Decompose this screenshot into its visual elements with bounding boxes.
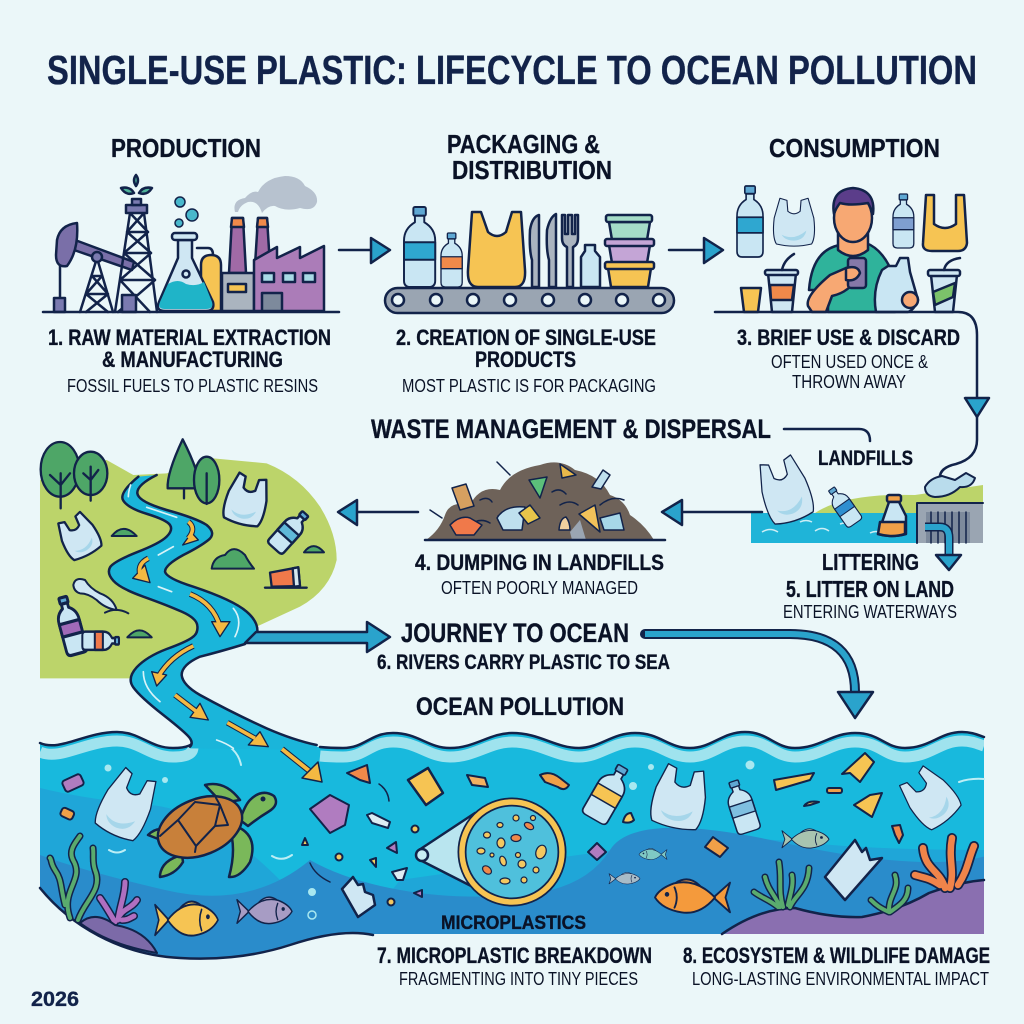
icon: trees (41, 439, 219, 508)
icon: large bottle (404, 207, 435, 287)
illustration: litter scene (751, 453, 983, 570)
heading: waste management: WASTE MANAGEMENT & DISPERSAL (371, 414, 771, 444)
text: step 3: OFTEN USED ONCE & (771, 352, 928, 372)
heading: ocean pollution: OCEAN POLLUTION (416, 693, 624, 721)
text: step 4: OFTEN POORLY MANAGED (441, 578, 638, 598)
icon: seaweed small (871, 875, 908, 912)
debris right (540, 753, 903, 860)
illustration: land and river (40, 439, 337, 750)
icon: ocean bag left (91, 764, 163, 845)
icon: orange bottle (878, 495, 906, 536)
text: step 1: 1. RAW MATERIAL EXTRACTION (48, 325, 331, 350)
ocean outline (40, 732, 984, 959)
arrow head (965, 398, 989, 417)
yellow flow arrows (133, 522, 268, 747)
text: step 3: 3. BRIEF USE & DISCARD (737, 325, 960, 350)
icon: small teal fish (639, 848, 667, 860)
icon: ocean bottle right (722, 778, 761, 835)
sea floor right (722, 880, 986, 936)
icon: purple fish (237, 897, 292, 924)
icon: yellow bag right (923, 195, 967, 251)
cone (419, 813, 475, 888)
illustration: landfill pile (425, 462, 665, 540)
illustration: consumption (737, 186, 967, 312)
icon: person (808, 188, 895, 312)
icon: land bottles (53, 595, 119, 656)
icon: factory (222, 218, 324, 311)
icon: bottle right (893, 194, 914, 248)
heading: packaging and distribution: DISTRIBUTION (452, 155, 612, 185)
icon: purple coral (100, 882, 137, 922)
text: step 5: ENTERING WATERWAYS (783, 602, 957, 622)
icon: shaker (581, 245, 600, 287)
connector line (784, 429, 870, 441)
icon: fish right (782, 829, 829, 848)
water highlights (109, 740, 984, 859)
icon: pump jack (54, 223, 134, 312)
arrow: journey to ocean (645, 634, 873, 718)
text: step 1: & MANUFACTURING (102, 347, 283, 372)
illustration: packaging conveyor (385, 207, 674, 313)
text: step 6: 6. RIVERS CARRY PLASTIC TO SEA (377, 651, 670, 674)
small yellow arrow in ocean (282, 749, 322, 782)
icon: floating bag (753, 453, 817, 528)
text: step 7 (377, 943, 652, 989)
text: step 7: 7. MICROPLASTIC BREAKDOWN (377, 943, 652, 968)
icon: floating bottle (824, 484, 863, 528)
icon: green cup (928, 258, 960, 312)
text: step 2 (396, 325, 656, 396)
text: step 8 (683, 943, 990, 989)
icon: yellow fish (155, 901, 218, 936)
hill (815, 485, 983, 513)
arrow: packaging to consumption (669, 238, 723, 263)
icon: stacked containers (605, 215, 654, 287)
label: microplastics: MICROPLASTICS (441, 913, 586, 934)
icon: land bottle (267, 507, 313, 555)
text: step 1: FOSSIL FUELS TO PLASTIC RESINS (67, 376, 318, 396)
icon: yellow cup (408, 768, 443, 805)
text: step 3: THROWN AWAY (792, 372, 906, 392)
icon: knives and fork (530, 214, 578, 287)
landfill items (450, 464, 624, 540)
icon: small bottle (441, 233, 462, 287)
text: step 2: 2. CREATION OF SINGLE-USE (396, 325, 656, 350)
icon: oil derrick (115, 175, 157, 312)
heading: packaging and distribution: PACKAGING & (447, 129, 600, 159)
flow line: consumption to litter (715, 312, 989, 480)
icon: turtle (148, 784, 276, 877)
icon: small cup (741, 288, 761, 312)
arrow: river to journey (245, 622, 390, 652)
label: landfills: LANDFILLS (818, 447, 913, 470)
icon: conveyor belt (385, 288, 674, 313)
year: 2026 (31, 988, 79, 1011)
water (751, 513, 921, 543)
icon: plastic shard (342, 877, 375, 917)
text: journey to ocean: JOURNEY TO OCEAN (401, 618, 629, 648)
icon: large cup (765, 254, 798, 312)
icon: discarded cup (265, 567, 307, 588)
text: step 2: PRODUCTS (475, 347, 576, 372)
heading: consumption: CONSUMPTION (769, 133, 940, 163)
text: step 7: FRAGMENTING INTO TINY PIECES (399, 969, 638, 989)
icon: crushed bottle (875, 258, 918, 312)
heading: packaging and distribution (447, 129, 612, 185)
bubbles (104, 760, 754, 919)
icon: bottle yellow band (581, 760, 635, 826)
icon: yellow bag (468, 212, 525, 287)
lens (416, 849, 428, 861)
text: step 3 (737, 325, 960, 392)
debris left (59, 765, 488, 906)
icon: orange fish (655, 879, 730, 913)
text: step 1 (48, 325, 331, 396)
text: step 5: 5. LITTER ON LAND (786, 576, 954, 602)
icon: crushed bottle on drain (925, 473, 975, 497)
text: step 5 (783, 549, 957, 622)
land area (40, 458, 337, 678)
icon: ocean bag center (648, 762, 712, 833)
arrow: litter to landfill (662, 500, 762, 525)
icon: ocean bag right (894, 761, 965, 834)
icon: storm drain (917, 503, 983, 543)
text: step 2: MOST PLASTIC IS FOR PACKAGING (402, 376, 656, 396)
heading: production: PRODUCTION (111, 133, 261, 163)
icon: seaweed right (754, 862, 809, 907)
river (109, 475, 317, 750)
illustration: production (43, 175, 339, 312)
icon: rock left (80, 917, 157, 953)
text: step 4: 4. DUMPING IN LANDFILLS (415, 550, 664, 575)
text: step 5: LITTERING (822, 549, 919, 575)
icon: bushes (112, 529, 324, 637)
panel: ocean (38, 730, 986, 960)
arrow: drain outflow (925, 527, 961, 570)
text: step 4 (415, 550, 664, 598)
particles (477, 815, 548, 884)
icon: torn bag (825, 840, 882, 900)
icon: land bags (53, 471, 272, 563)
icon: bottle left (737, 186, 763, 257)
icon: smoke cloud (234, 176, 317, 213)
icon: seaweed left (50, 836, 97, 920)
ocean water (40, 733, 984, 958)
icon: purple crumple (310, 795, 349, 833)
icon: small gray fish (609, 872, 640, 884)
arrow: landfill to land (338, 500, 418, 525)
icon: bag left (773, 198, 815, 246)
microplastics magnifier (416, 802, 562, 902)
arrow: production to packaging (339, 238, 390, 263)
icon: chemical flask (158, 197, 221, 311)
icon: orange coral (915, 838, 974, 888)
icon: spoon (73, 579, 128, 613)
